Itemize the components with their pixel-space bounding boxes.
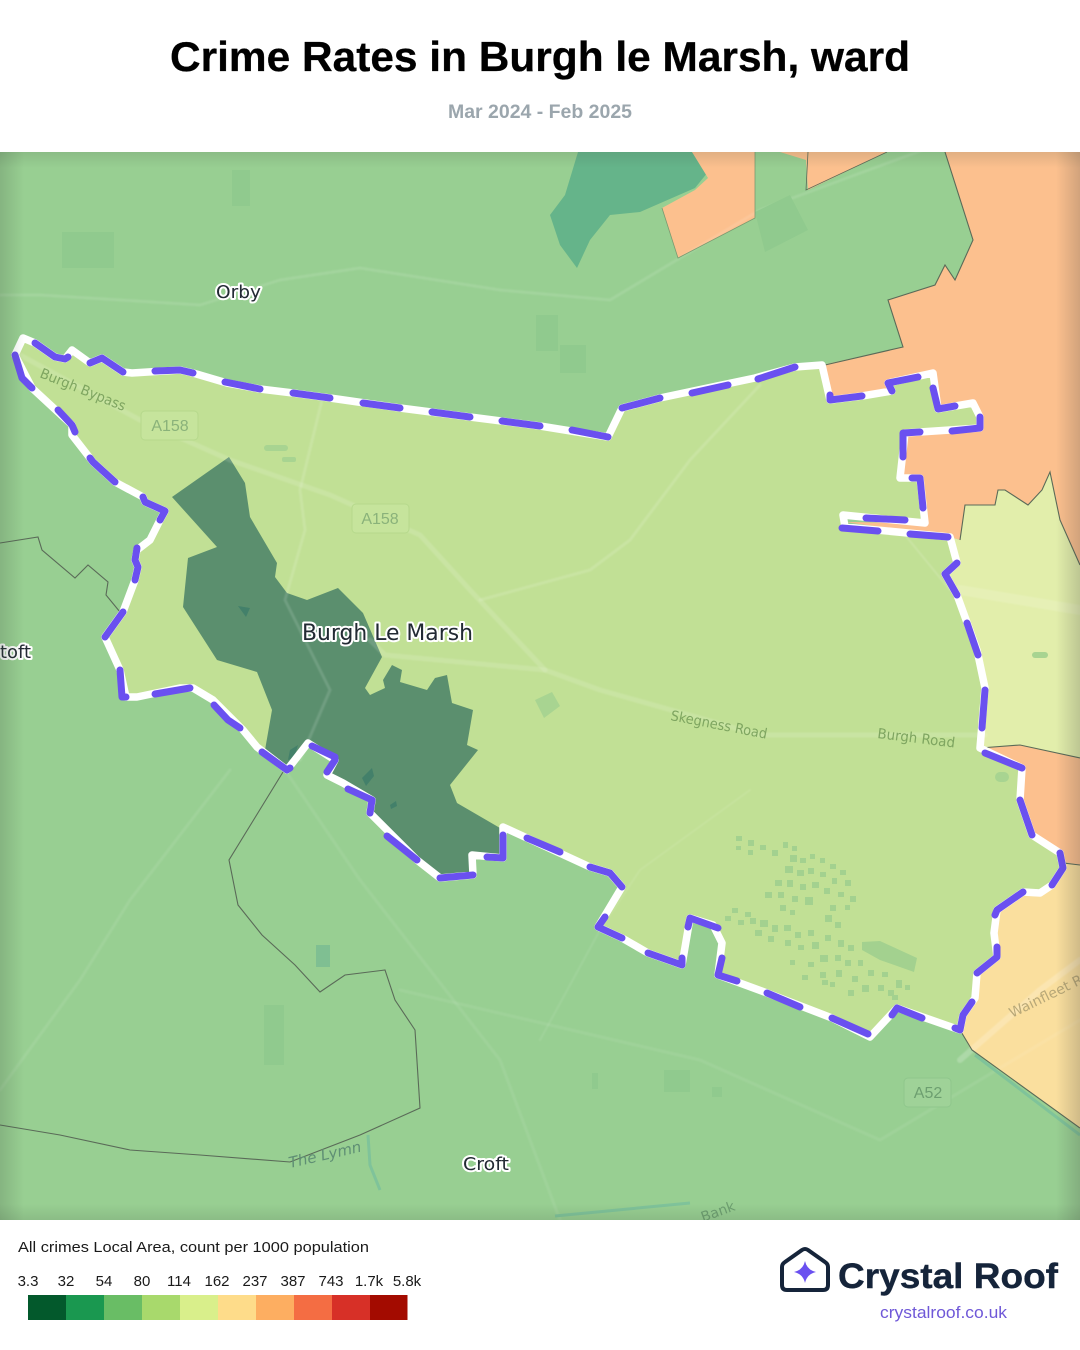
area: teal low-crime patch top xyxy=(550,152,708,268)
icon: house with star xyxy=(782,1249,828,1290)
map edge vignette xyxy=(0,152,1080,1220)
label: The Lymn: The Lymn xyxy=(287,1138,363,1172)
subtitle: date range: Mar 2024 - Feb 2025 xyxy=(448,102,632,123)
title: Crime Rates in Burgh le Marsh, ward xyxy=(170,33,910,80)
logo wordmark: Crystal Roof xyxy=(838,1257,1058,1296)
holiday park chalets xyxy=(725,836,910,1000)
fields and small water bodies xyxy=(316,196,794,967)
label: Bank: Bank xyxy=(699,1198,738,1226)
legend scale values: 5.8k xyxy=(393,1273,422,1290)
ward outline: white line xyxy=(15,338,1063,1037)
road shield: A158 east xyxy=(352,504,409,533)
road shield: A158 east: A158 xyxy=(361,511,399,528)
legend colour bar xyxy=(28,1295,408,1320)
road shield: A158 west: A158 xyxy=(151,418,189,435)
road shield: A158 west xyxy=(141,411,198,440)
legend xyxy=(18,1239,422,1320)
legend scale values: 743 xyxy=(318,1273,344,1290)
place labels xyxy=(0,282,509,1175)
ward boundary lines xyxy=(0,152,1080,1162)
label: Burgh Bypass: Burgh Bypass xyxy=(38,366,128,415)
logo: Crystal Roof xyxy=(782,1249,1058,1322)
label: Burgh Le Marsh: Burgh Le Marsh xyxy=(302,621,473,646)
legend scale values xyxy=(18,1273,422,1290)
legend scale values: 54 xyxy=(96,1273,112,1290)
road shield: A52 xyxy=(904,1078,951,1107)
label: toft: toft xyxy=(0,642,31,663)
legend title: All crimes Local Area, count per 1000 population xyxy=(18,1239,369,1256)
legend scale values: 114 xyxy=(167,1273,191,1290)
area: orange high-crime east xyxy=(822,152,1080,565)
legend scale values: 3.3 xyxy=(18,1273,38,1290)
water: rivers and drains xyxy=(368,1055,1080,1216)
area: pale yellow-green east xyxy=(945,472,1080,758)
legend scale values: 387 xyxy=(280,1273,306,1290)
area: village low-crime zone xyxy=(172,457,503,878)
label: Croft: Croft xyxy=(463,1154,509,1175)
legend scale values: 1.7k xyxy=(355,1273,384,1290)
road labels xyxy=(38,366,1080,1226)
legend scale values: 237 xyxy=(242,1273,268,1290)
ward outline: purple dashes xyxy=(15,343,1063,1034)
label: Skegness Road: Skegness Road xyxy=(669,708,768,743)
legend scale values: 80 xyxy=(134,1273,150,1290)
area: orange south-east xyxy=(980,745,1080,865)
area: cream south-east xyxy=(960,863,1080,1128)
pond in holiday park xyxy=(862,941,917,972)
legend scale values: 162 xyxy=(204,1273,230,1290)
label: Orby: Orby xyxy=(216,282,261,303)
area: orange patches top xyxy=(662,152,887,258)
map base: surrounding low-crime areas xyxy=(0,152,1080,1220)
area: Burgh le Marsh ward fill xyxy=(15,338,1063,1037)
road shield: A52: A52 xyxy=(914,1085,942,1102)
label: Burgh Road: Burgh Road xyxy=(877,726,956,751)
roads xyxy=(0,152,1080,1064)
website url: crystalroof.co.uk xyxy=(880,1303,1008,1322)
legend scale values: 32 xyxy=(58,1273,74,1290)
